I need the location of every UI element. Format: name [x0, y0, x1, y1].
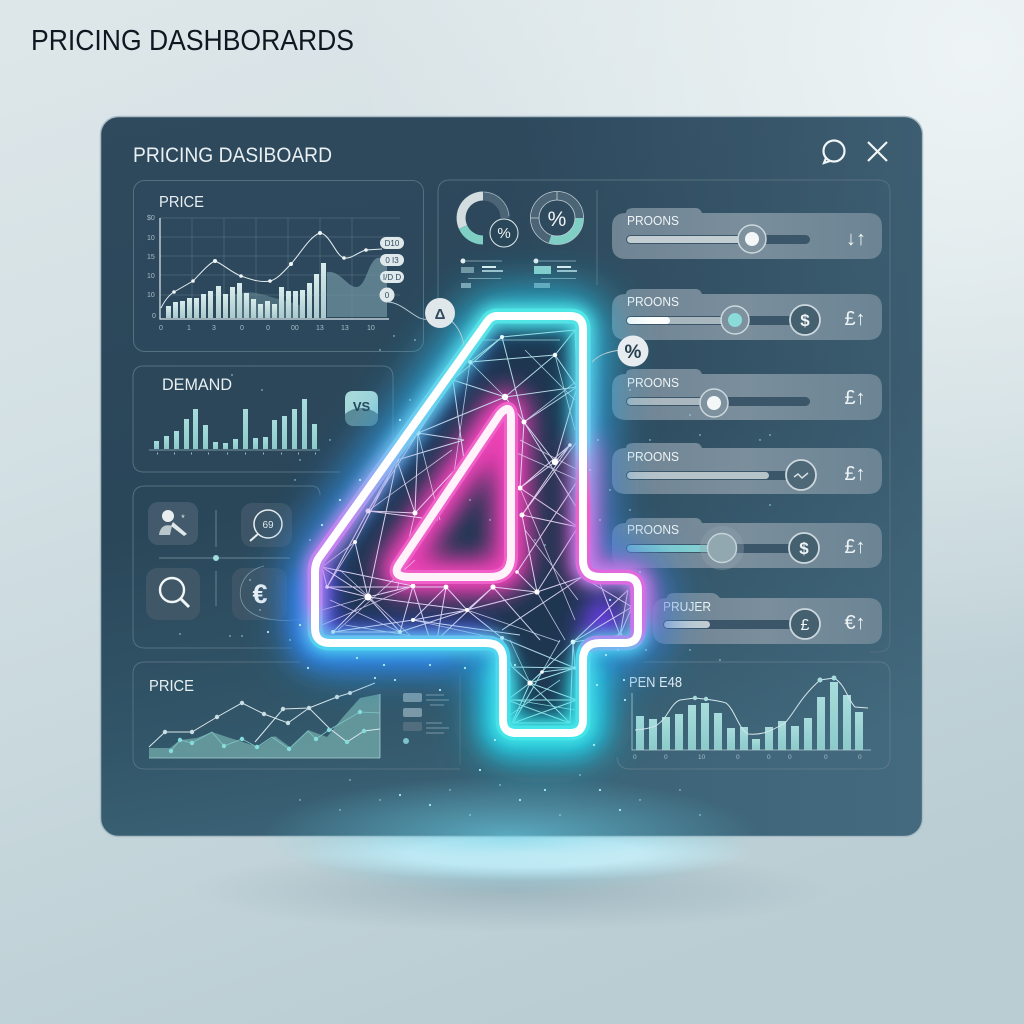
slider row 4 — [612, 443, 882, 494]
chart: price bars and line: 1 — [187, 325, 191, 332]
connector badge: percent — [592, 336, 648, 366]
chart: price bars and line: 10 — [147, 235, 155, 242]
slider row 3: £↑ — [844, 387, 866, 409]
mini legend left — [460, 258, 503, 288]
donut gauge with percent badge: % — [497, 225, 511, 242]
glow beneath the window — [190, 825, 830, 932]
page title: PRICING DASHBORARDS — [31, 25, 354, 57]
icon: people tile: * — [181, 513, 185, 523]
badge: versus: VS — [353, 399, 370, 414]
chart: price bars and line — [147, 215, 400, 332]
heading: price: PRICE — [159, 194, 204, 211]
slider row 5: $ — [799, 539, 809, 558]
connector badge: percent: % — [625, 342, 642, 363]
badge: versus — [345, 391, 378, 426]
slider row 2: £↑ — [844, 308, 866, 330]
chart: price bars and line: 0 — [152, 313, 156, 320]
heading: price trend: PRICE — [149, 678, 194, 695]
slider row 1: ↓↑ — [846, 228, 866, 250]
donut gauge with centered percent — [530, 192, 584, 244]
slider row 6: €↑ — [844, 612, 866, 634]
neon tube inner triangle — [397, 409, 511, 577]
slider row 2: $ — [800, 311, 810, 330]
donut gauge with percent badge — [461, 192, 518, 247]
donut gauge with centered percent: % — [548, 208, 566, 231]
icon: euro tile: € — [252, 579, 268, 609]
slider row 3: PROONS — [627, 375, 679, 390]
chart: price bars and line: 00 — [291, 325, 299, 332]
chart: price bars and line: 13 — [316, 325, 324, 332]
dark interior — [315, 316, 638, 733]
chart: price bars and line: 10 — [147, 292, 155, 299]
value tags — [380, 237, 404, 302]
icon: search bubble control — [824, 140, 844, 163]
chart: price bars and line: 10 — [147, 273, 155, 280]
mini legend right — [534, 258, 577, 288]
icon: search tile with digits: 69 — [262, 520, 274, 531]
chart: price bars and line: 15 — [147, 254, 155, 261]
slider row 3 — [612, 369, 882, 420]
outer glow — [308, 316, 638, 742]
chart: teal bars and curve: 0 — [767, 754, 771, 761]
value tags: 0 I3 — [385, 256, 399, 265]
slider row 5 — [612, 518, 882, 570]
slider row 4: £↑ — [844, 463, 866, 485]
panel: pricing controls — [438, 180, 890, 652]
panel: pen bars chart — [617, 662, 890, 769]
slider row 6: PRUJER — [663, 599, 711, 614]
chart: teal bars and curve: 0 — [633, 754, 637, 761]
chart: price bars and line: 0 — [159, 325, 163, 332]
slider row 4: PROONS — [627, 449, 679, 464]
slider row 1: PROONS — [627, 213, 679, 228]
chart: price bars and line: $0 — [147, 215, 155, 222]
panel: price trend chart — [133, 662, 460, 769]
chart: price bars and line: 10 — [367, 325, 375, 332]
chart: teal bars and curve: 0 — [664, 754, 668, 761]
panel: demand chart — [133, 366, 393, 472]
icon: close control — [868, 142, 887, 161]
slider row 5: PROONS — [627, 522, 679, 537]
neon tube outer — [315, 316, 638, 733]
legend list — [403, 693, 449, 744]
slider row 2: PROONS — [627, 294, 679, 309]
heading: demand: DEMAND — [162, 375, 232, 394]
icon: search tile with digits — [241, 503, 292, 547]
icon: people tile — [148, 502, 198, 545]
value tags: I/D D — [383, 273, 401, 282]
icon: euro tile — [232, 566, 312, 620]
window title: PRICING DASIBOARD — [133, 144, 332, 167]
chart: price bars and line: 13 — [341, 325, 349, 332]
slider row 5: £↑ — [844, 536, 866, 558]
panel: icon grid — [133, 486, 320, 648]
chart: price trend area and lines — [149, 683, 380, 758]
slider row 2 — [612, 289, 882, 340]
panel: price chart — [134, 180, 424, 352]
slider row 6: £ — [801, 617, 810, 634]
chart: teal bars and curve: 10 — [698, 754, 706, 761]
neon numeral four — [308, 316, 638, 742]
chart: teal bars and curve: 0 — [858, 754, 862, 761]
network mesh and interior glow — [318, 316, 635, 733]
chart: teal bars and curve — [632, 676, 871, 761]
icon: magnifier tile — [146, 568, 200, 620]
dashboard window — [100, 116, 922, 896]
chart: price bars and line: 3 — [212, 325, 216, 332]
chart: teal bars and curve: 0 — [736, 754, 740, 761]
slider row 1 — [612, 208, 882, 259]
chart: demand bars — [149, 399, 320, 454]
chart: price bars and line: 0 — [240, 325, 244, 332]
sparkle particles — [180, 320, 770, 815]
chart: teal bars and curve: 0 — [824, 754, 828, 761]
heading: pen bars: PEN E48 — [629, 674, 682, 691]
slider row 6 — [653, 593, 882, 644]
value tags: D10 — [385, 239, 400, 248]
value tags: 0 — [385, 291, 390, 300]
chart: price bars and line: 0 — [266, 325, 270, 332]
connector badge: arrow tag — [387, 298, 464, 345]
chart: teal bars and curve: 0 — [788, 754, 792, 761]
divider cross — [159, 510, 290, 606]
connector badge: arrow tag: Δ — [435, 306, 446, 323]
